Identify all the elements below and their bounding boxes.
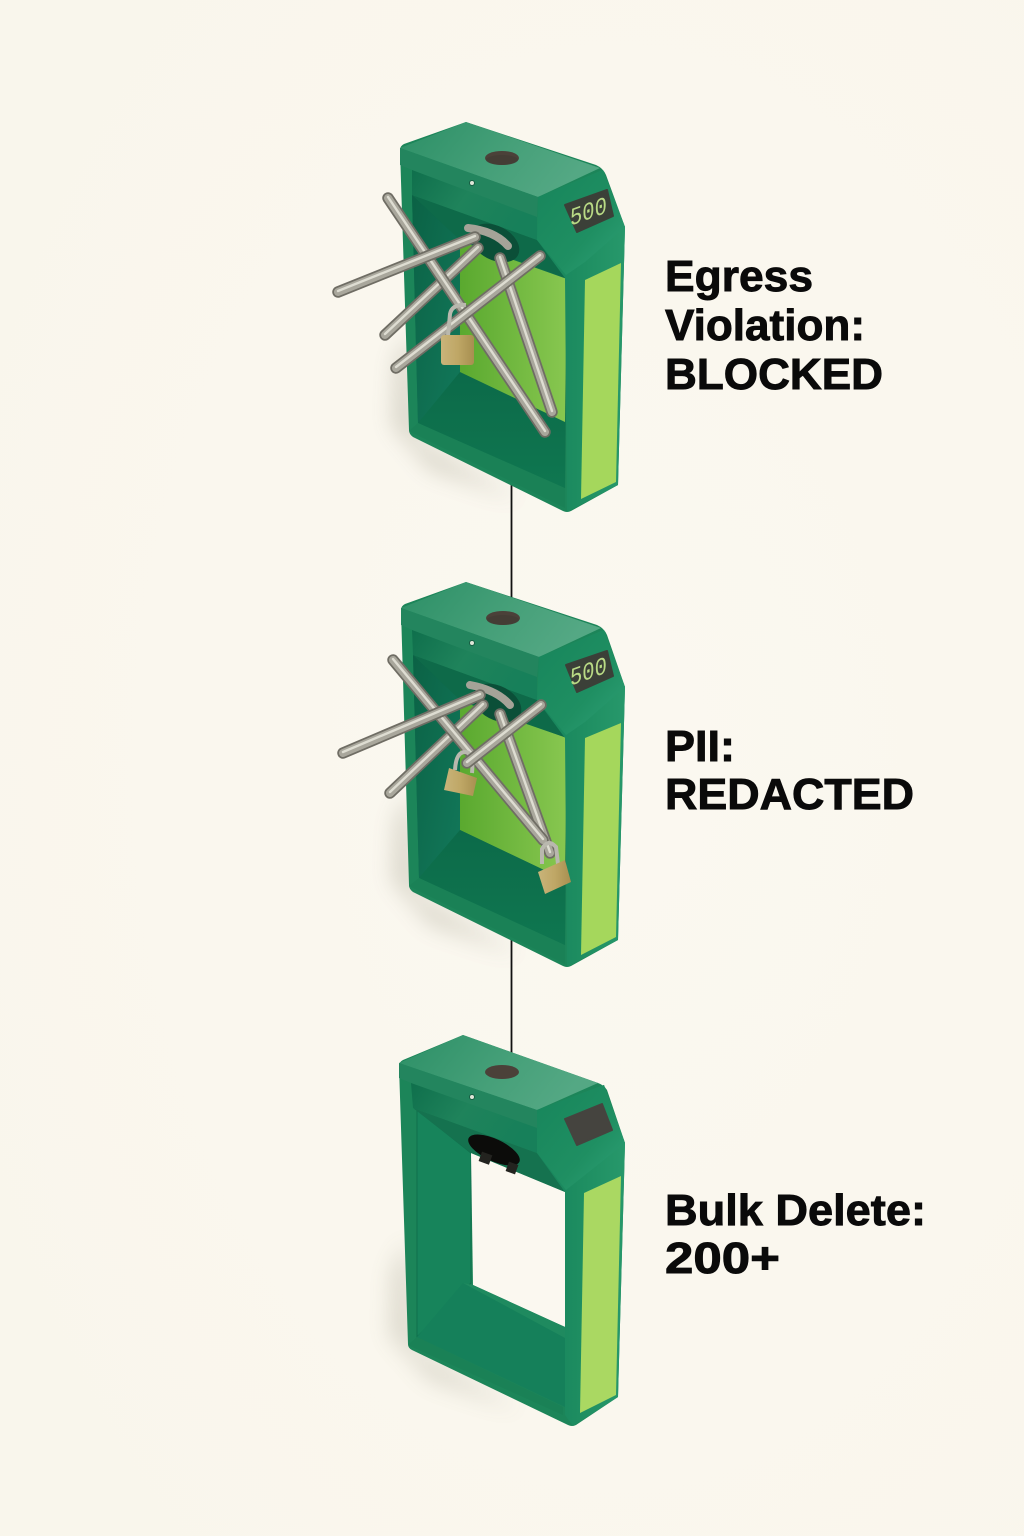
turnstile 3: bulk delete (390, 1035, 625, 1426)
turnstile 1 bars (338, 197, 552, 432)
turnstile 3 hood (413, 1108, 565, 1192)
turnstile 1 shadow (392, 330, 520, 500)
turnstile 1 top face (400, 122, 600, 197)
turnstile 2 screw (470, 640, 474, 646)
label: egress violation blocked: BLOCKED (665, 350, 883, 399)
turnstile 3 blank display (565, 1104, 612, 1145)
turnstile 3 floor front (408, 1337, 563, 1415)
turnstile 3 back sill (463, 1283, 565, 1338)
turnstile 1 side column (537, 170, 625, 512)
turnstile 3 header panel (411, 1083, 537, 1153)
turnstile 1 opening (409, 195, 567, 508)
turnstile 2 header panel (412, 630, 537, 700)
turnstile 2 padlock two (538, 843, 571, 894)
turnstile 3 top face (399, 1035, 598, 1110)
turnstile 2 front bar (467, 704, 541, 763)
turnstile 1 display: 500 (570, 192, 607, 235)
turnstile 2 hub (466, 676, 528, 730)
turnstile 2 body (401, 582, 625, 967)
turnstile 3 shadow (390, 1240, 520, 1410)
turnstile 3 front rim (399, 1063, 537, 1128)
turnstile 1 hub (464, 216, 526, 270)
turnstile 2 shadow (392, 790, 520, 955)
label: bulk delete 200+: Bulk Delete: (665, 1186, 926, 1235)
turnstile 2 opening (409, 655, 567, 964)
connector line: middle to bottom (510, 935, 512, 1054)
turnstile 1 disc (485, 151, 519, 165)
turnstile 3 side facet (537, 1085, 625, 1190)
turnstile 3 window (471, 1153, 565, 1327)
turnstile 2 display: 500 (570, 652, 607, 695)
turnstile 1 padlock (441, 305, 474, 365)
turnstile 3 disc (485, 1065, 519, 1079)
turnstile 2 front rim (401, 608, 539, 677)
turnstile 3 lime strip (580, 1176, 621, 1413)
turnstile 2 side facet (537, 630, 625, 735)
turnstile 2 lime strip (581, 723, 621, 955)
turnstile 3 screw (470, 1094, 474, 1100)
turnstile 1 front rim (400, 148, 538, 217)
turnstile 1 screw (470, 180, 474, 186)
turnstile 1 side facet (537, 170, 625, 275)
turnstile 2: redacted (343, 582, 625, 967)
turnstile 2 bars (343, 659, 550, 853)
turnstile 1: blocked (338, 122, 625, 512)
turnstile 3 side column (537, 1085, 625, 1426)
turnstile 1 lime strip (581, 263, 621, 499)
turnstile 3 left wall (417, 1110, 471, 1337)
connector line: top to middle (510, 480, 512, 600)
label: pii redacted: PII: (665, 722, 735, 771)
turnstile 1 body (400, 122, 625, 512)
turnstile 3 empty hub (464, 1128, 524, 1174)
turnstile 1 header panel (412, 170, 537, 240)
turnstile 3 body (399, 1035, 625, 1426)
label: egress violation blocked: Violation: (665, 301, 865, 350)
label: egress violation blocked: Egress (665, 252, 813, 301)
turnstile 2 disc (486, 611, 520, 625)
turnstile 2 padlock one (444, 752, 477, 796)
turnstile 3 floor (417, 1283, 565, 1407)
label: bulk delete 200+: 200+ (665, 1234, 780, 1283)
turnstile 2 top face (401, 582, 601, 657)
turnstile 2 side column (537, 630, 625, 967)
label: pii redacted: REDACTED (665, 770, 914, 819)
